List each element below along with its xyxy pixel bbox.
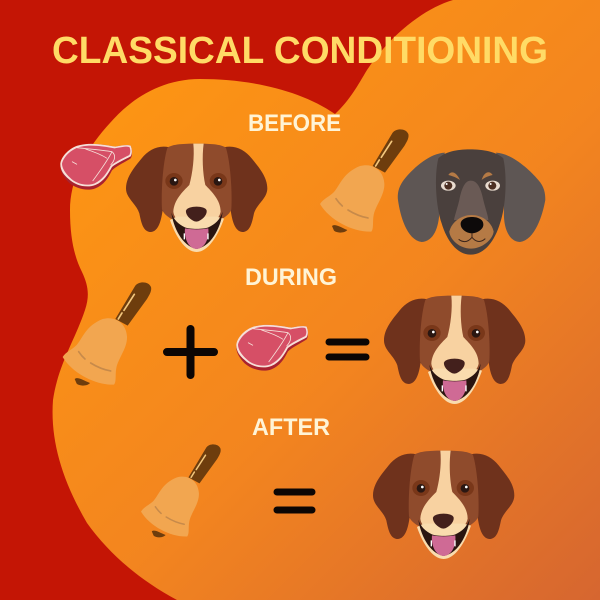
heading: before: BEFORE	[248, 110, 341, 137]
icon: equals sign, after	[277, 492, 312, 510]
icon: bell, during	[63, 282, 151, 386]
icon: meat, during	[236, 325, 308, 371]
heading: after: AFTER	[252, 414, 330, 441]
heading: during: DURING	[245, 264, 337, 291]
icon: bell, after	[141, 444, 221, 537]
icon: brown dog, during	[384, 296, 525, 404]
icon: brown dog, before	[126, 144, 267, 252]
icon: bell, before	[320, 129, 409, 233]
icon: brown dog, after	[373, 451, 514, 559]
icon: meat, before	[60, 144, 132, 190]
icon: equals sign, during	[329, 342, 366, 357]
icon: dark dog, before	[398, 149, 545, 255]
title: CLASSICAL CONDITIONING	[52, 30, 548, 72]
icon: plus sign	[167, 329, 214, 375]
